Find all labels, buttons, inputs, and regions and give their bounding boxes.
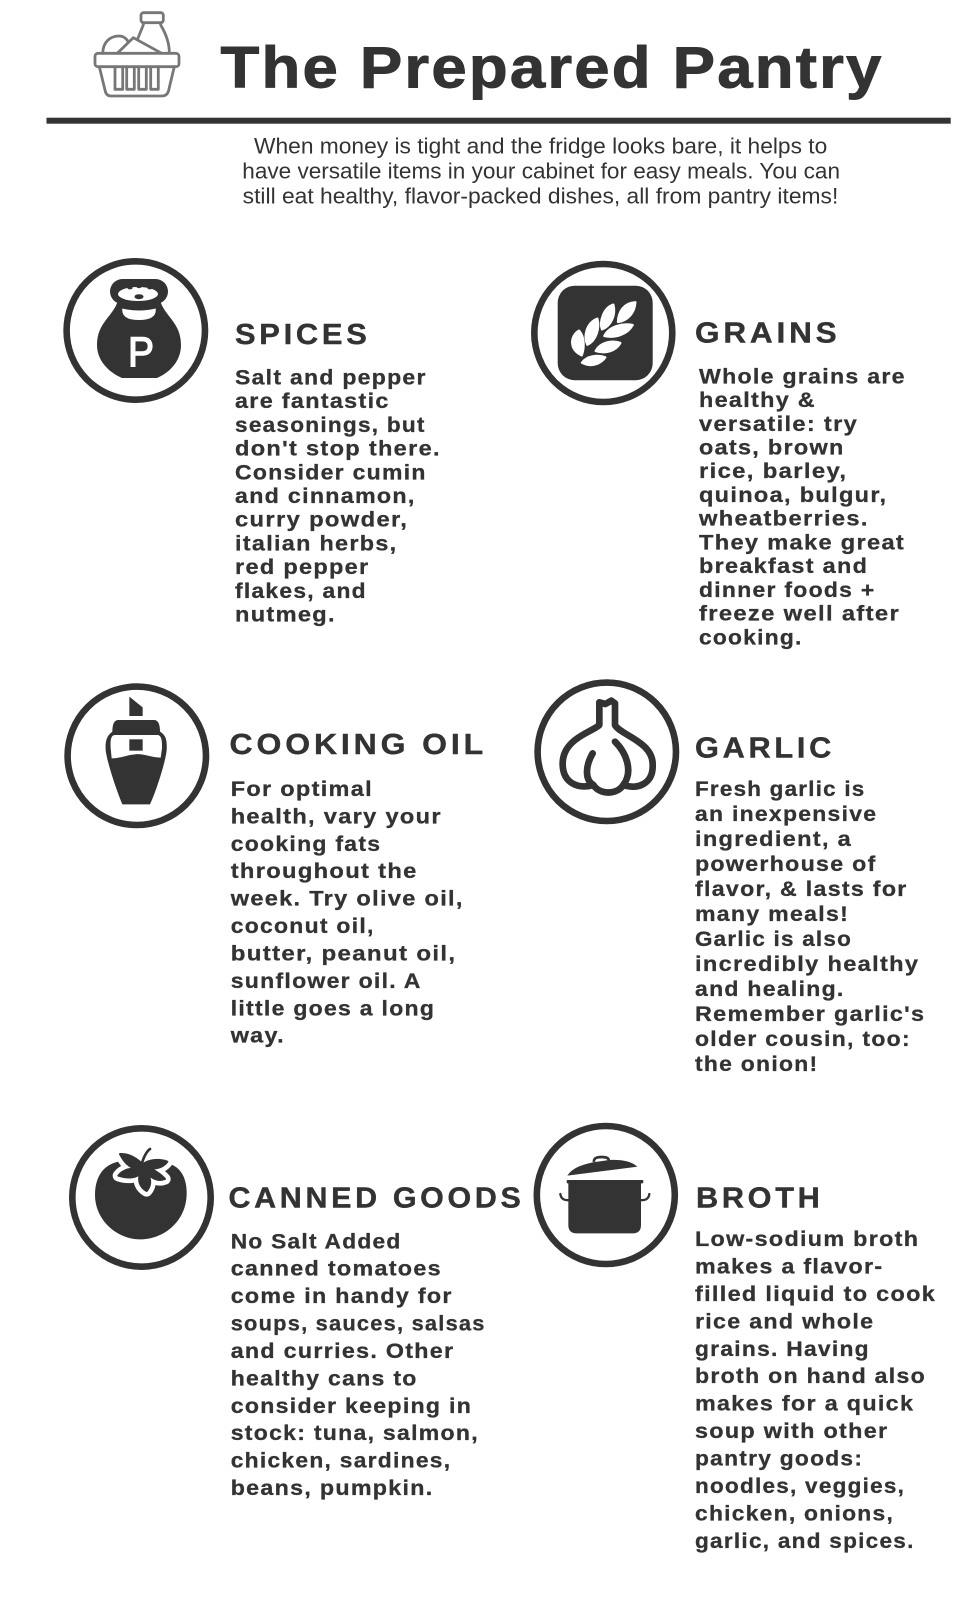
text: spices: nutmeg. bbox=[235, 602, 336, 627]
text: grains: wheatberries. bbox=[698, 506, 869, 531]
text: cooking oil bbox=[230, 776, 464, 1048]
text: grains bbox=[698, 363, 906, 649]
intro text bbox=[242, 133, 840, 208]
text: garlic: Garlic is also bbox=[695, 926, 852, 951]
icon: wheat bbox=[534, 264, 672, 402]
text: garlic: ingredient, a bbox=[695, 826, 852, 851]
text: grains: freeze well after bbox=[699, 601, 900, 626]
text: spices: seasonings, but bbox=[235, 412, 426, 437]
text: broth: soup with other bbox=[695, 1418, 888, 1443]
text: garlic: the onion! bbox=[695, 1051, 818, 1076]
text: broth: Low-sodium broth bbox=[695, 1226, 919, 1251]
text: spices: and cinnamon, bbox=[235, 483, 416, 508]
heading: garlic: GARLIC bbox=[695, 733, 835, 765]
text: cooking oil: health, vary your bbox=[231, 803, 442, 828]
text: cooking oil: week. Try olive oil, bbox=[230, 886, 464, 911]
icon: oil bottle bbox=[68, 687, 206, 825]
heading: broth: BROTH bbox=[696, 1183, 824, 1215]
icon: tomato bbox=[72, 1128, 211, 1267]
heading: cooking oil: COOKING OIL bbox=[230, 729, 487, 761]
text: broth: rice and whole bbox=[695, 1308, 874, 1333]
text: canned goods: chicken, sardines, bbox=[231, 1448, 451, 1473]
text: canned goods: No Salt Added bbox=[231, 1228, 402, 1253]
text: grains: healthy & bbox=[699, 387, 816, 412]
text: canned goods: canned tomatoes bbox=[231, 1256, 442, 1281]
text: garlic: older cousin, too: bbox=[695, 1026, 911, 1051]
panel: canned goods bbox=[72, 1128, 525, 1500]
text: cooking oil: sunflower oil. A bbox=[231, 968, 422, 993]
text: cooking oil: For optimal bbox=[231, 776, 373, 801]
text: garlic: powerhouse of bbox=[695, 851, 877, 876]
text: garlic: Remember garlic's bbox=[695, 1001, 925, 1026]
text: spices: are fantastic bbox=[235, 388, 390, 413]
header rule bbox=[46, 118, 951, 124]
text: canned goods bbox=[231, 1228, 486, 1500]
heading: spices: SPICES bbox=[235, 319, 370, 351]
text: garlic: flavor, & lasts for bbox=[695, 876, 908, 901]
text: spices: Salt and pepper bbox=[235, 364, 427, 389]
panel: broth bbox=[537, 1126, 936, 1553]
text: spices: Consider cumin bbox=[235, 459, 427, 484]
text: garlic: many meals! bbox=[695, 901, 849, 926]
intro text: still eat healthy, flavor-packed dishes, all from pantry items! bbox=[243, 183, 838, 208]
text: broth: noodles, veggies, bbox=[695, 1473, 905, 1498]
text: spices: flakes, and bbox=[235, 578, 367, 603]
text: canned goods: healthy cans to bbox=[231, 1365, 418, 1390]
panel: grains bbox=[534, 264, 906, 649]
text: spices: red pepper bbox=[235, 554, 370, 579]
text: broth: makes for a quick bbox=[695, 1391, 914, 1416]
icon: pepper shaker: P bbox=[128, 328, 154, 375]
text: grains: rice, barley, bbox=[699, 458, 847, 483]
text: cooking oil: coconut oil, bbox=[231, 913, 375, 938]
text: grains: They make great bbox=[699, 529, 905, 554]
intro text: When money is tight and the fridge looks bare, it helps to bbox=[254, 133, 827, 158]
text: grains: breakfast and bbox=[699, 553, 868, 578]
text: garlic: an inexpensive bbox=[695, 801, 877, 826]
text: broth: broth on hand also bbox=[695, 1363, 926, 1388]
icon: garlic bulb bbox=[538, 683, 676, 821]
text: grains: cooking. bbox=[699, 624, 803, 649]
text: canned goods: beans, pumpkin. bbox=[231, 1475, 434, 1500]
text: grains: Whole grains are bbox=[699, 363, 906, 388]
text: spices: italian herbs, bbox=[235, 531, 397, 555]
header bbox=[46, 13, 951, 124]
text: garlic: Fresh garlic is bbox=[695, 776, 866, 801]
text: grains: quinoa, bulgur, bbox=[699, 482, 887, 507]
text: broth: grains. Having bbox=[695, 1336, 870, 1361]
title: The Prepared Pantry bbox=[220, 35, 884, 100]
text: cooking oil: cooking fats bbox=[231, 831, 381, 856]
text: canned goods: consider keeping in bbox=[231, 1393, 472, 1418]
text: grains: oats, brown bbox=[699, 435, 845, 459]
text: cooking oil: butter, peanut oil, bbox=[231, 941, 456, 965]
text: canned goods: come in handy for bbox=[231, 1283, 453, 1308]
panel: garlic bbox=[538, 683, 925, 1076]
text: canned goods: and curries. Other bbox=[231, 1338, 454, 1363]
text: grains: dinner foods + bbox=[699, 577, 876, 602]
text: broth: pantry goods: bbox=[695, 1446, 863, 1470]
text: grains: versatile: try bbox=[699, 411, 858, 436]
text: canned goods: stock: tuna, salmon, bbox=[231, 1420, 479, 1445]
text: broth: chicken, onions, bbox=[695, 1500, 894, 1525]
panel: cooking oil bbox=[68, 687, 487, 1048]
text: garlic: incredibly healthy bbox=[695, 951, 919, 976]
text: cooking oil: throughout the bbox=[231, 858, 418, 883]
icon: grocery basket bbox=[95, 13, 179, 96]
text: broth: garlic, and spices. bbox=[695, 1528, 915, 1553]
text: garlic: and healing. bbox=[695, 976, 845, 1001]
icon: pepper shaker bbox=[67, 261, 205, 400]
heading: grains: GRAINS bbox=[695, 317, 840, 349]
text: spices bbox=[235, 364, 441, 627]
heading: canned goods: CANNED GOODS bbox=[228, 1183, 524, 1215]
text: garlic bbox=[695, 776, 925, 1076]
panel: spices bbox=[67, 261, 441, 627]
text: broth: filled liquid to cook bbox=[695, 1281, 936, 1306]
icon: stock pot bbox=[537, 1126, 675, 1264]
text: canned goods: soups, sauces, salsas bbox=[231, 1311, 486, 1335]
text: cooking oil: little goes a long bbox=[231, 995, 435, 1020]
text: spices: don't stop there. bbox=[235, 436, 441, 460]
text: broth bbox=[695, 1226, 936, 1553]
text: broth: makes a flavor- bbox=[695, 1253, 883, 1278]
text: cooking oil: way. bbox=[230, 1023, 285, 1048]
intro text: have versatile items in your cabinet for easy meals. You can bbox=[242, 158, 840, 183]
text: spices: curry powder, bbox=[235, 507, 408, 532]
